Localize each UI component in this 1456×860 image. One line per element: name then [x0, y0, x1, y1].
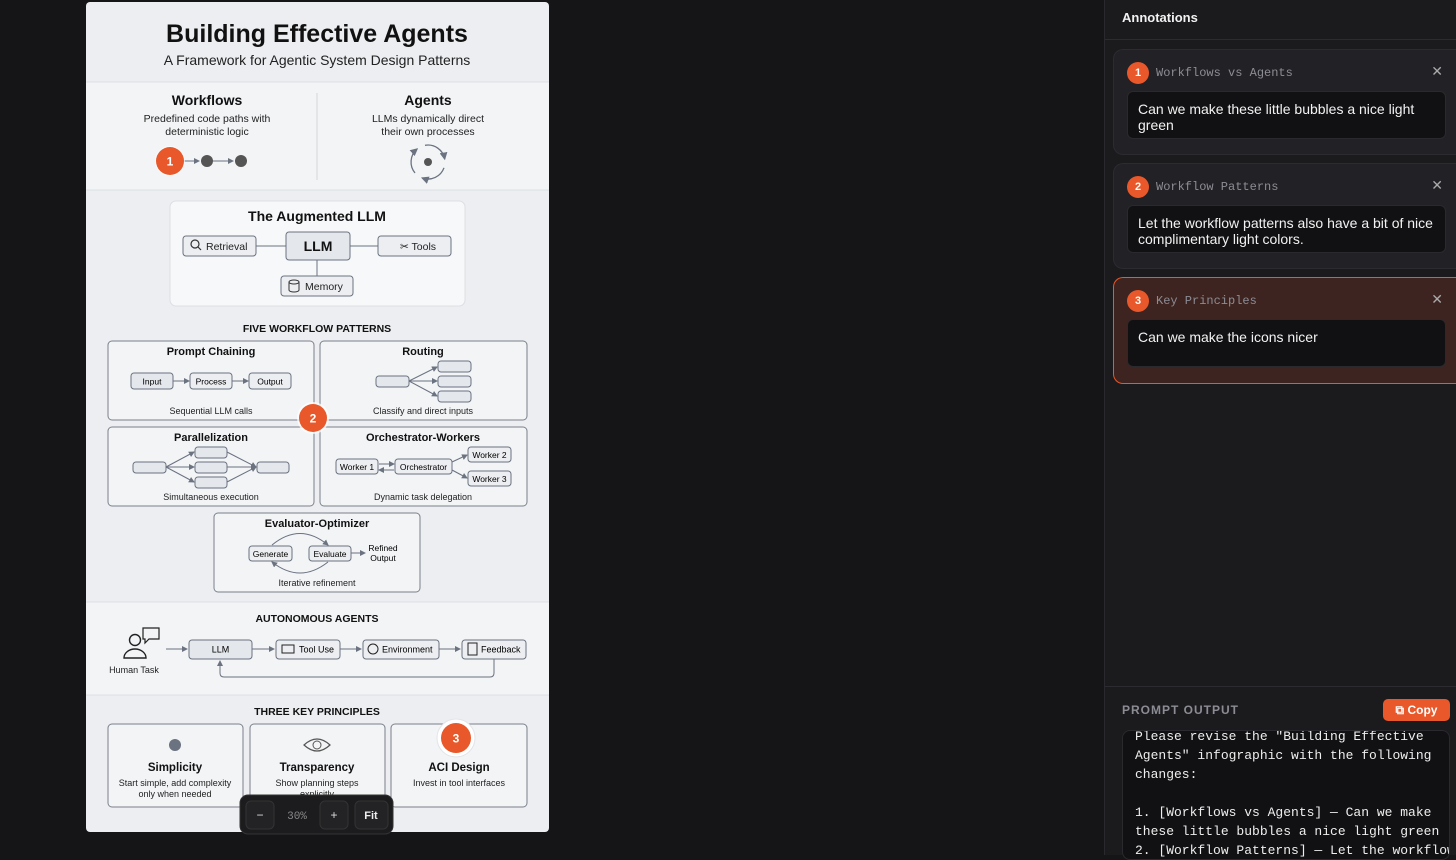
heading: prompt output: PROMPT OUTPUT [1122, 703, 1239, 717]
panel: agents: LLMs dynamically direct [372, 113, 484, 125]
panel: orchestrator-workers [320, 427, 527, 506]
annotation card 2: ✕ [1431, 177, 1443, 193]
panel: orchestrator-workers: Worker 2 [472, 450, 507, 460]
badge 1: 1 [167, 154, 174, 168]
heading: autonomous agents: AUTONOMOUS AGENTS [255, 613, 379, 625]
panel: routing: Classify and direct inputs [373, 406, 474, 416]
annotation card 2: Workflow Patterns [1156, 180, 1278, 194]
panel: augmented LLM: Memory [305, 281, 344, 293]
panel: agents: Agents [404, 92, 452, 108]
infographic card [86, 2, 549, 834]
panel: annotations sidebar [1104, 0, 1456, 855]
zoom control: 30% [287, 811, 307, 823]
panel: orchestrator-workers: Orchestrator-Workers [366, 432, 480, 444]
panel: workflows [144, 92, 270, 167]
panel: routing [320, 341, 527, 420]
panel: evaluator-optimizer: Evaluate [313, 549, 347, 559]
zoom control: − [256, 808, 264, 822]
annotation card 1: Can we make these little bubbles a nice light green [1138, 101, 1414, 133]
panel: parallelization: Simultaneous execution [163, 492, 259, 502]
panel: augmented LLM [170, 201, 465, 306]
panel: evaluator-optimizer: Output [370, 553, 396, 563]
annotation card 1: ✕ [1431, 63, 1443, 79]
panel: simplicity: Start simple, add complexity [119, 778, 232, 788]
panel: orchestrator-workers: Dynamic task delegation [374, 492, 472, 502]
title [164, 20, 470, 68]
icon: human task: Human Task [109, 665, 159, 675]
panel: simplicity [108, 724, 243, 807]
panel: prompt chaining [108, 341, 314, 420]
panel: workflows: Predefined code paths with [144, 113, 270, 125]
panel: prompt chaining: Output [257, 376, 283, 386]
panel: prompt chaining: Prompt Chaining [167, 346, 255, 358]
flow: agent loop [166, 640, 526, 677]
badge 3: 3 [453, 732, 460, 746]
panel: agents: their own processes [381, 126, 475, 138]
panel: orchestrator-workers: Worker 1 [340, 462, 374, 472]
zoom control: Fit [364, 810, 378, 822]
panel: augmented LLM: LLM [304, 238, 332, 254]
panel: augmented LLM: Retrieval [206, 241, 247, 253]
panel: evaluator-optimizer: Iterative refinement [278, 578, 356, 588]
annotation card 3: Can we make the icons nicer [1138, 329, 1318, 345]
annotation card 2: 2 [1135, 181, 1141, 193]
panel: augmented LLM: ✂ Tools [400, 241, 436, 253]
panel: ACI design [391, 724, 527, 807]
panel: prompt chaining: Sequential LLM calls [169, 406, 253, 416]
badge 3 [437, 719, 475, 757]
heading: five workflow patterns: FIVE WORKFLOW PATTERNS [243, 323, 391, 335]
panel: simplicity: Simplicity [148, 762, 203, 774]
panel: ACI design: ACI Design [428, 762, 490, 774]
zoom control: + [330, 808, 338, 822]
annotation card 3: ✕ [1431, 291, 1443, 307]
panel: transparency: explicitly [300, 789, 335, 799]
annotation card 1: 1 [1135, 67, 1141, 79]
badge 1 [155, 146, 185, 176]
panel: simplicity: only when needed [138, 789, 212, 799]
panel: transparency [250, 724, 385, 807]
title: A Framework for Agentic System Design Patterns [164, 52, 470, 68]
annotation card 1 [1113, 49, 1456, 155]
annotation card 3 [1113, 277, 1456, 384]
panel: routing: Routing [402, 346, 444, 358]
annotation card 2 [1113, 163, 1456, 269]
panel: augmented LLM: The Augmented LLM [248, 208, 386, 224]
annotation card 1: Workflows vs Agents [1156, 66, 1293, 80]
panel: parallelization: Parallelization [174, 432, 248, 444]
flow: agent loop: Tool Use [299, 644, 334, 654]
panel: agents [372, 92, 484, 179]
annotation card 3: 3 [1135, 295, 1141, 307]
panel: workflows: Workflows [172, 92, 242, 108]
panel: parallelization [108, 427, 314, 506]
panel: evaluator-optimizer: Generate [253, 549, 288, 559]
panel: evaluator-optimizer: Refined [368, 543, 398, 553]
copy button [1383, 699, 1450, 721]
icon: human task [109, 628, 159, 675]
zoom control [240, 795, 393, 834]
icon: cycle [411, 145, 445, 179]
flow: agent loop: Environment [382, 644, 433, 654]
panel: orchestrator-workers: Orchestrator [400, 462, 447, 472]
flow: agent loop: Feedback [481, 644, 521, 654]
panel: evaluator-optimizer [214, 513, 420, 592]
heading: three key principles: THREE KEY PRINCIPLES [254, 706, 380, 718]
title: Building Effective Agents [166, 20, 468, 48]
panel: ACI design: Invest in tool interfaces [413, 778, 506, 788]
panel: orchestrator-workers: Worker 3 [472, 474, 507, 484]
badge 2 [297, 402, 329, 434]
flow: agent loop: LLM [212, 644, 229, 654]
panel: evaluator-optimizer: Evaluator-Optimizer [265, 518, 370, 530]
panel: transparency: Transparency [280, 762, 355, 774]
panel: workflows: deterministic logic [165, 126, 249, 138]
annotation card 3: Key Principles [1156, 294, 1257, 308]
annotation card 2: Let the workflow patterns also have a bit of nice complimentary light colors. [1138, 215, 1433, 247]
panel: transparency: Show planning steps [275, 778, 359, 788]
heading: annotations: Annotations [1122, 10, 1198, 25]
badge 2: 2 [310, 412, 317, 426]
prompt output text: Please revise the "Building Effective Agents" infographic with the following changes: 1. [Workflows vs Agents] — Can we make these little bubbles a nice light green 2. [Workflow Patterns] — Let the workflow [1135, 730, 1450, 858]
panel: prompt chaining: Input [143, 376, 162, 386]
copy button: ⧉ Copy [1396, 703, 1437, 717]
panel: prompt chaining: Process [196, 376, 226, 386]
